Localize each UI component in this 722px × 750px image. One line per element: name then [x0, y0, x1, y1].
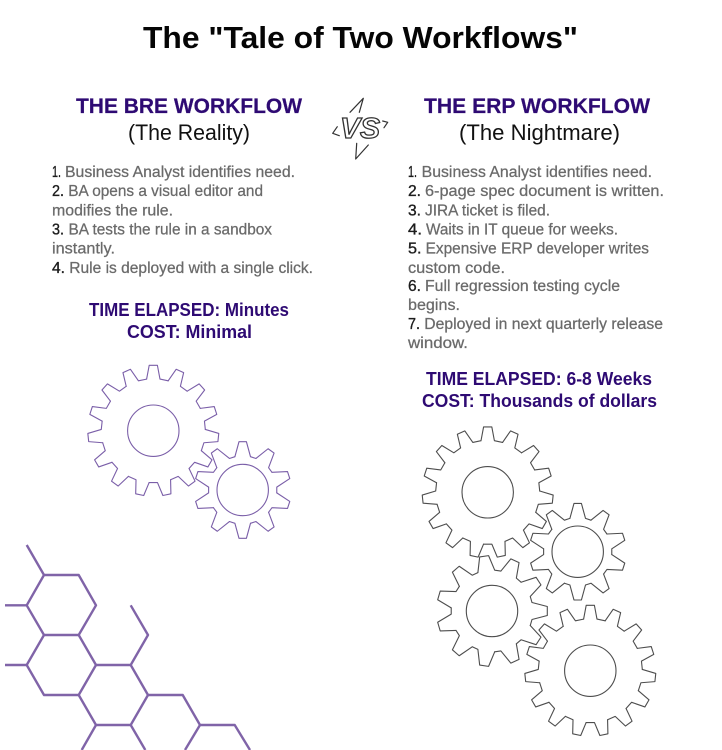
steps list: BRE: Rule is deployed with a single click.: [69, 260, 313, 277]
steps list: ERP: 3.: [408, 202, 421, 220]
result: ERP time and cost: [422, 369, 657, 411]
steps list: ERP: Deployed in next quarterly release: [424, 316, 663, 333]
steps list: ERP: begins.: [408, 297, 460, 314]
result: BRE time and cost: COST: Minimal: [127, 322, 252, 342]
steps list: ERP: 6.: [408, 278, 421, 295]
steps list: ERP: custom code.: [408, 260, 505, 277]
steps list: BRE: [52, 164, 313, 277]
steps list: ERP: [407, 164, 664, 352]
steps list: ERP: Waits in IT queue for weeks.: [426, 222, 618, 238]
subheading: the nightmare: (The Nightmare): [459, 120, 620, 145]
icon: purple gears: [87, 365, 293, 538]
steps list: ERP: 7.: [408, 316, 420, 333]
icon: VS badge: [333, 98, 388, 159]
steps list: ERP: 6-page spec document is written.: [425, 183, 664, 200]
heading: the ERP workflow: THE ERP WORKFLOW: [424, 94, 651, 118]
subheading: the reality: (The Reality): [128, 120, 250, 145]
heading: the BRE workflow: THE BRE WORKFLOW: [76, 94, 303, 118]
steps list: ERP: window.: [407, 335, 468, 352]
result: BRE time and cost: [89, 300, 289, 342]
steps list: ERP: Full regression testing cycle: [425, 278, 620, 295]
icon: grey gears: [421, 427, 657, 738]
result: ERP time and cost: TIME ELAPSED: 6-8 Weeks: [426, 369, 652, 389]
result: ERP time and cost: COST: Thousands of dollars: [422, 391, 657, 411]
decoration: hexagon pattern: [5, 545, 250, 750]
steps list: BRE: 1.: [52, 164, 61, 181]
steps list: BRE: Business Analyst identifies need.: [65, 164, 295, 181]
result: BRE time and cost: TIME ELAPSED: Minutes: [89, 300, 289, 320]
steps list: ERP: Business Analyst identifies need.: [422, 164, 652, 181]
steps list: ERP: 1.: [408, 164, 417, 181]
icon: VS badge: VS: [340, 113, 381, 145]
steps list: ERP: Expensive ERP developer writes: [426, 240, 649, 258]
steps list: ERP: 5.: [408, 240, 422, 258]
title: The "Tale of Two Workflows": [143, 20, 578, 55]
steps list: BRE: BA opens a visual editor and: [68, 183, 263, 200]
steps list: ERP: JIRA ticket is filed.: [425, 202, 550, 220]
panel: BRE workflow: [52, 94, 313, 538]
steps list: BRE: BA tests the rule in a sandbox: [68, 222, 272, 238]
steps list: BRE: modifies the rule.: [52, 202, 173, 220]
steps list: ERP: 2.: [408, 183, 421, 200]
panel: ERP workflow: [407, 94, 664, 738]
steps list: BRE: 4.: [52, 260, 65, 277]
steps list: ERP: 4.: [408, 222, 422, 238]
steps list: BRE: instantly.: [52, 240, 115, 258]
steps list: BRE: 2.: [52, 183, 64, 200]
steps list: BRE: 3.: [52, 222, 64, 238]
